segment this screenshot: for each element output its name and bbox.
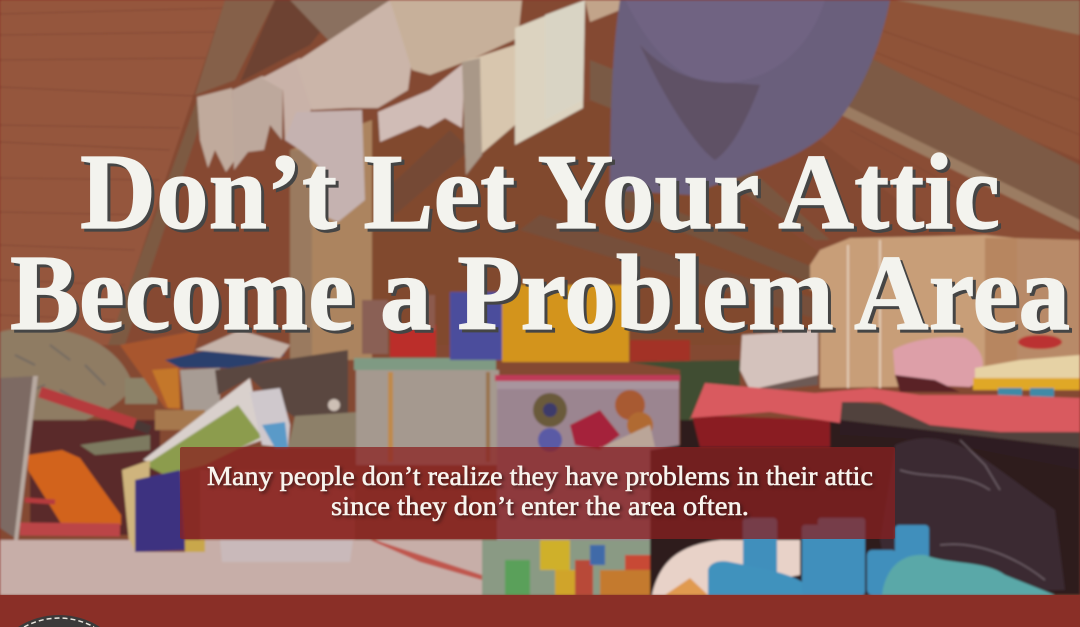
clutter: cabinet [356,370,499,465]
dark green behind bin [629,360,740,420]
title: Don’t Let Your Attic [80,133,1000,252]
toy [973,335,1080,400]
clutter: tote [288,412,360,448]
blue chair [708,518,929,595]
subtitle panel [180,447,895,539]
white cloth [652,540,800,595]
dark right lower area [650,420,1080,595]
clutter: grey panel [0,376,32,538]
red containers [362,300,388,354]
clutter: orange crate [28,450,121,525]
clutter: paper bag and green [143,378,262,470]
clutter: red bars [40,392,135,424]
pillar [290,120,372,360]
clutter: cushion [0,328,131,422]
clear bin with toys [497,378,679,543]
white plastic bag and cardboard boxes [1016,236,1080,361]
subtitle: since they don’t enter the area often. [331,491,749,521]
clutter: dark under-stool area [30,420,160,535]
clutter: clear bin on floor [200,539,355,540]
diagonal beam right [850,60,1080,219]
teal cloth [882,555,1055,595]
red blanket [690,383,1080,432]
clutter: dark bag [215,350,348,422]
lego blocks [480,539,652,595]
back wall [196,138,197,140]
badge icon [18,615,100,627]
floor [0,540,482,595]
subtitle [207,461,873,521]
title [10,133,1070,353]
subtitle: Many people don’t realize they have problems in their attic [207,461,873,491]
blue hanging tarp [610,0,890,195]
bottom band [0,595,1080,627]
clothes on the line [197,0,585,222]
wood ceiling right [874,1,1079,158]
table [840,400,1080,448]
black bag [880,438,1065,595]
clutter: striped bag [122,460,150,552]
yellow and blue box [450,292,502,360]
clutter: orange bucket, bin, orange wall tub [120,330,200,410]
pink plush [893,337,983,387]
